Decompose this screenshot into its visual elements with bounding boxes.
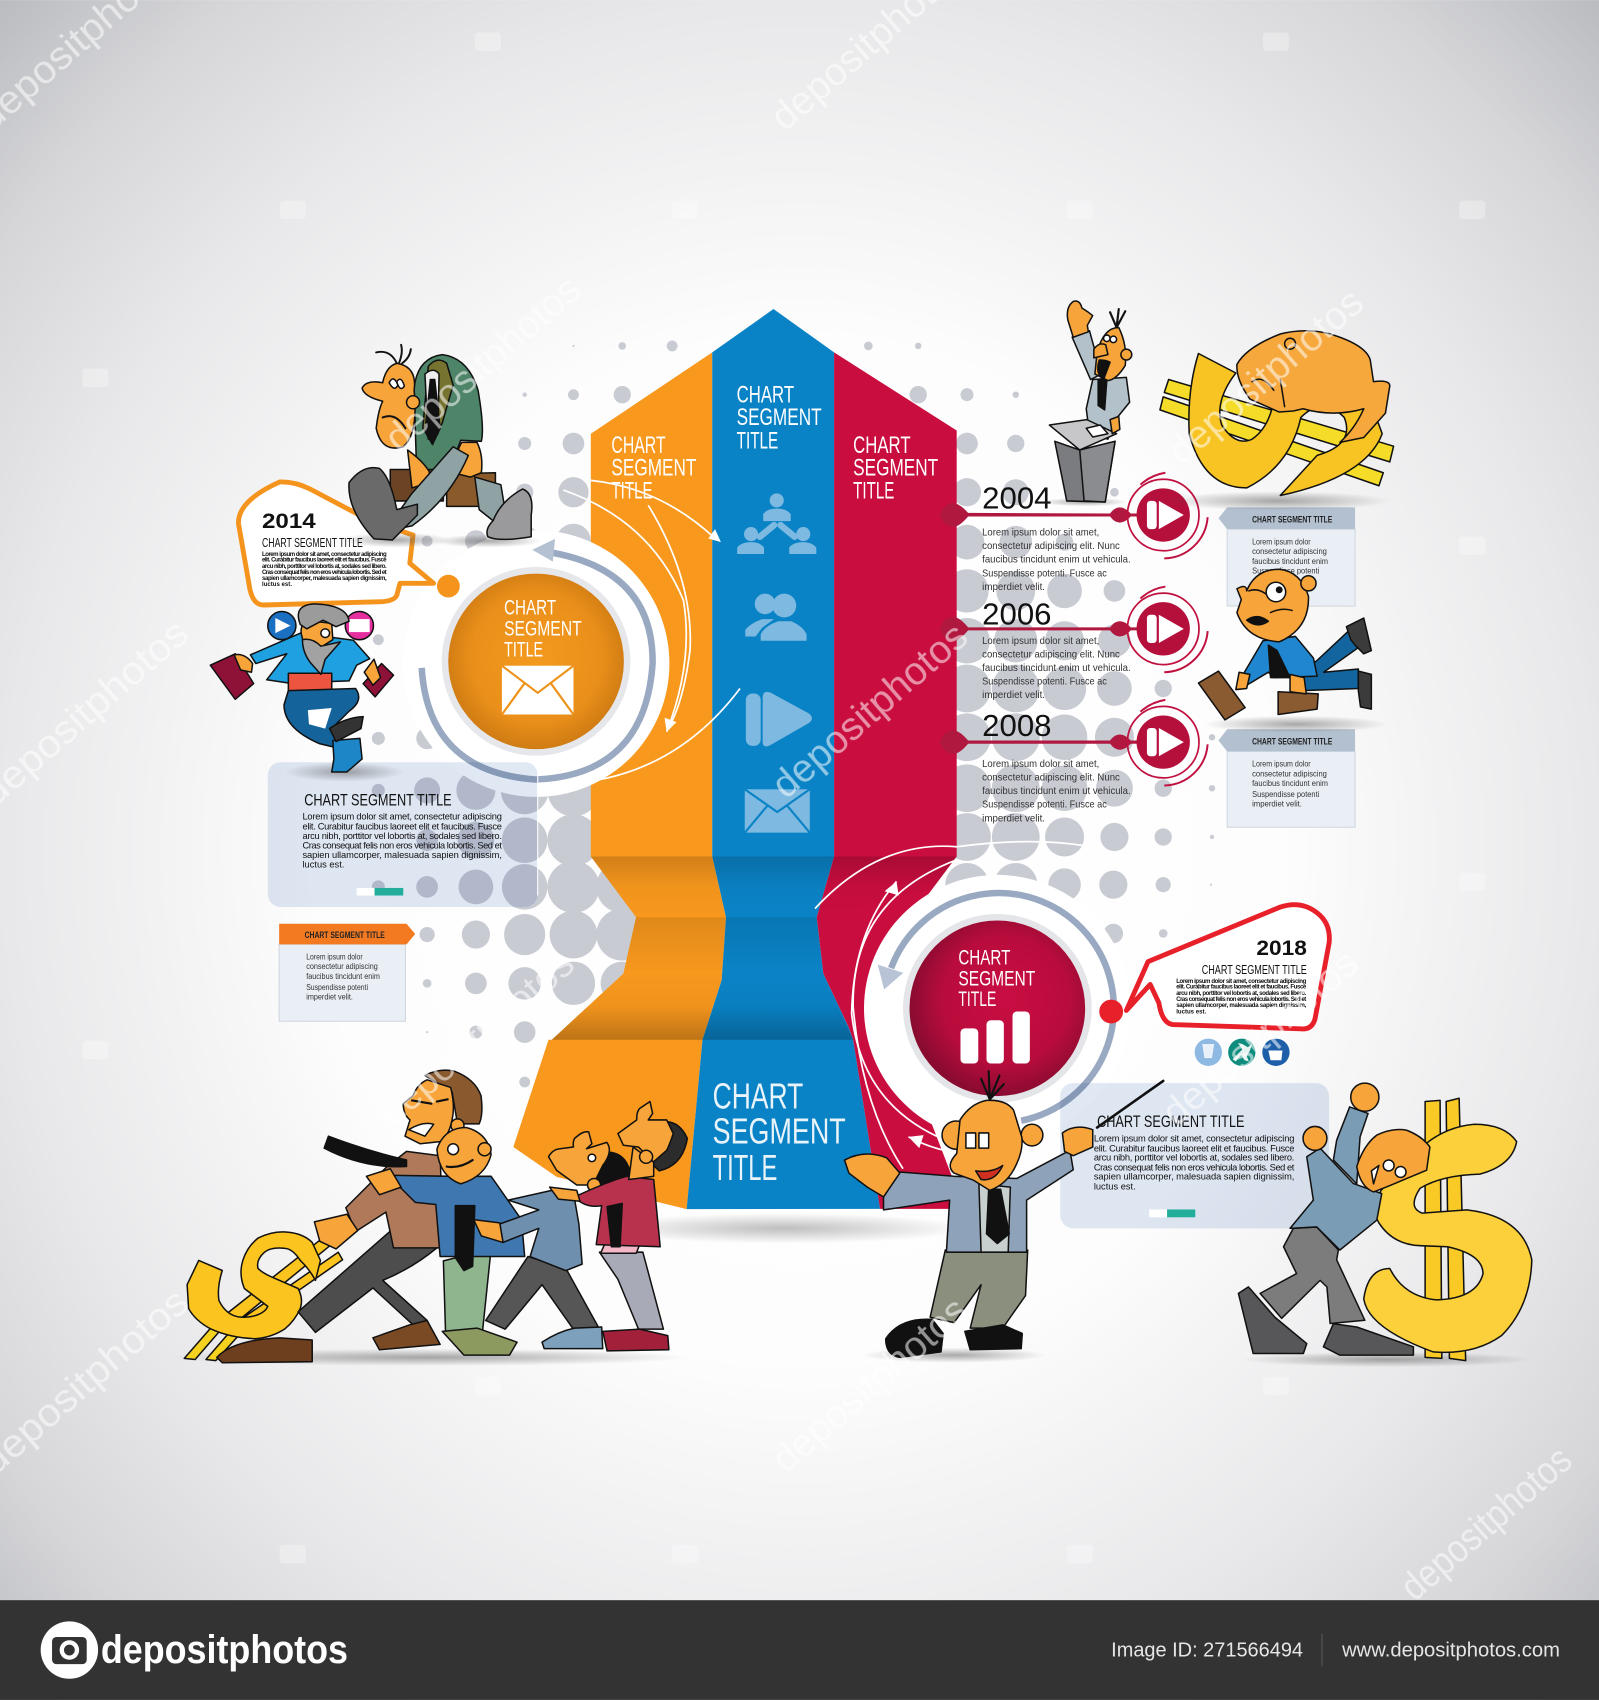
heading: CHART SEGMENT TITLE (1252, 736, 1332, 746)
watermarks: depositphotos (1154, 942, 1366, 1134)
footer bar (0, 1600, 1599, 1700)
panel body text (1094, 1134, 1295, 1191)
text: Suspendisse potenti. Fusce ac (982, 568, 1107, 579)
icon: two people (745, 594, 807, 641)
image id: Image ID: 271566494 (1111, 1639, 1303, 1662)
text: faucibus tincidunt enim ut vehicula. (982, 663, 1131, 674)
text: faucibus tincidunt enim (1252, 557, 1328, 566)
panel body text: luctus est. (1094, 1181, 1136, 1191)
disc heading: CHART (958, 945, 1010, 970)
watermarks: depositphotos (370, 942, 582, 1134)
man three (474, 1132, 630, 1349)
watermarks: depositphotos (1159, 281, 1372, 473)
info box: top right (1218, 507, 1355, 606)
icon: blue play badge (268, 612, 296, 640)
crimson band heading: TITLE (853, 478, 894, 505)
year: 2004 (982, 483, 1052, 516)
orange band heading: SEGMENT (611, 454, 697, 481)
body text (262, 552, 387, 588)
halftone dot pattern (372, 340, 1215, 1087)
text: Suspendisse potenti. Fusce ac (982, 677, 1107, 688)
info box: lower right (1218, 729, 1355, 827)
panel body text: Lorem ipsum dolor sit amet, consectetur adipiscing (1094, 1134, 1294, 1144)
text: Lorem ipsum dolor (1252, 760, 1311, 769)
text: consectetur adipiscing elit. Nunc (982, 773, 1120, 784)
arrow band: crimson (817, 352, 957, 1209)
text: faucibus tincidunt enim (1252, 779, 1328, 788)
panel heading: CHART SEGMENT TITLE (1097, 1112, 1245, 1131)
panel body text (302, 812, 502, 869)
text (1252, 760, 1328, 809)
timeline: 2004 (940, 473, 1208, 593)
text: Suspendisse potenti (1252, 790, 1320, 799)
text (982, 759, 1131, 824)
watermarks: depositphotos (377, 268, 589, 460)
body text: Lorem ipsum dolor sit amet, consectetur adipiscing (1176, 979, 1307, 985)
thin white orbit arrows (563, 480, 1084, 1169)
page indicator (1149, 1209, 1195, 1217)
icon: envelope (745, 789, 810, 833)
panel body text: Lorem ipsum dolor sit amet, consectetur adipiscing (302, 812, 502, 822)
text: faucibus tincidunt enim ut vehicula. (982, 786, 1131, 797)
crimson band heading: CHART (853, 432, 911, 459)
panel body text: Cras consequat felis non eros vehicula lobortis. Sed et (1094, 1162, 1295, 1172)
panel body text: arcu nibh, porttitor vel lobortis at, sodales sed libero. (302, 831, 502, 841)
logo icon (41, 1621, 98, 1679)
disc heading: SEGMENT (958, 965, 1035, 990)
crimson band heading: SEGMENT (853, 454, 938, 481)
character: bald man on big dollar (1160, 331, 1394, 496)
timeline: 2006 (940, 587, 1208, 701)
icon row: music, plane, coffee (1195, 1039, 1290, 1066)
disc heading: CHART (504, 595, 556, 620)
text: consectetur adipiscing elit. Nunc (982, 650, 1120, 661)
icon: bar chart (960, 1012, 1030, 1064)
icon: pink mail badge (345, 612, 373, 640)
heading: CHART SEGMENT TITLE (305, 930, 385, 940)
text (982, 528, 1131, 593)
heading: CHART SEGMENT TITLE (1202, 963, 1307, 977)
shadow under arrow (598, 1213, 967, 1244)
text: Lorem ipsum dolor (306, 952, 363, 961)
body text: arcu nibh, porttitor vel lobortis at, sodales sed libero. (262, 564, 387, 570)
body text: arcu nibh, porttitor vel lobortis at, sodales sed libero. (1176, 991, 1307, 997)
orange band heading: TITLE (611, 478, 653, 505)
blue band heading: CHART (737, 381, 794, 408)
body text: elit. Curabitur faucibus laoreet elit et faucibus. Fusce (262, 558, 387, 564)
text: Suspendisse potenti (306, 983, 368, 992)
arrow chart (513, 309, 957, 1209)
text: consectetur adipiscing (1252, 547, 1327, 556)
dollar stripes (1160, 380, 1394, 486)
disc heading: TITLE (504, 637, 543, 662)
pointer stick (1097, 1081, 1163, 1128)
circular arrow ring (880, 893, 1114, 1121)
year: 2018 (1256, 937, 1307, 960)
character: dancing professor with folders (210, 604, 394, 772)
watermarks: depositphotos (764, 614, 976, 807)
man four (550, 1102, 687, 1351)
character: weary walker with briefcases (349, 345, 532, 540)
icon: play (746, 692, 812, 746)
man two (366, 1128, 525, 1355)
left panel: chart segment title (268, 762, 538, 907)
blue band heading: SEGMENT (737, 404, 822, 431)
panel body text: arcu nibh, porttitor vel lobortis at, sodales sed libero. (1094, 1153, 1294, 1163)
circle: crimson segment (864, 875, 1131, 1142)
timeline: 2008 (940, 700, 1208, 824)
divider (1321, 1634, 1323, 1666)
site url: www.depositphotos.com (1341, 1639, 1560, 1662)
circle: orange segment (403, 530, 669, 797)
dot (437, 575, 460, 598)
panel body text: elit. Curabitur faucibus laoreet elit et faucibus. Fusce (302, 821, 502, 831)
body text: Cras consequat felis non eros vehicula lobortis. Sed et (1176, 997, 1306, 1003)
character: running man with briefcases (1198, 569, 1371, 720)
icon: envelope (502, 666, 573, 714)
text: consectetur adipiscing (1252, 769, 1327, 778)
panel body text: Cras consequat felis non eros vehicula lobortis. Sed et (302, 840, 502, 850)
text: imperdiet velit. (1252, 800, 1302, 809)
text: imperdiet velit. (306, 993, 353, 1002)
logo wordmark: depositphotos (101, 1628, 348, 1672)
icon: play button (1127, 587, 1208, 672)
arrow band: blue (687, 309, 880, 1209)
year: 2014 (262, 510, 316, 533)
body text: Cras consequat felis non eros vehicula lobortis. Sed et (262, 570, 387, 576)
panel body text: elit. Curabitur faucibus laoreet elit et faucibus. Fusce (1094, 1143, 1294, 1153)
disc heading: SEGMENT (504, 615, 582, 640)
right panel: chart segment title (1060, 1083, 1329, 1228)
text: Suspendisse potenti. Fusce ac (982, 800, 1107, 811)
text: imperdiet velit. (982, 690, 1045, 701)
man one (217, 1070, 482, 1363)
crimson band heading (853, 432, 938, 505)
character: man pushing big dollar (1238, 1083, 1532, 1361)
text: consectetur adipiscing elit. Nunc (982, 541, 1120, 552)
year: 2006 (982, 599, 1052, 632)
orange band heading (611, 432, 697, 505)
orange band heading: CHART (611, 432, 666, 459)
year: 2008 (982, 710, 1052, 743)
text: Suspendisse potenti (1252, 567, 1320, 576)
circular arrow ring (422, 539, 653, 780)
watermarks: depositphotos (764, 1289, 976, 1481)
character group: tug of war (184, 1070, 687, 1363)
dot (1099, 1000, 1123, 1023)
character: presenter with pointer (844, 1071, 1163, 1357)
text: Lorem ipsum dolor (1252, 537, 1311, 546)
watermarks: depositphotos (1392, 1438, 1580, 1609)
panel body text: sapien ullamcorper, malesuada sapien dignissim, (302, 850, 502, 860)
page indicator (357, 888, 403, 896)
icon: play button (1127, 473, 1208, 558)
callout: 2018 (1099, 905, 1329, 1029)
disc heading (504, 595, 582, 662)
body text: sapien ullamcorper, malesuada sapien dignissim, (262, 576, 387, 582)
heading: CHART SEGMENT TITLE (262, 536, 363, 550)
large bottom heading: TITLE (713, 1148, 777, 1188)
heading: CHART SEGMENT TITLE (1252, 515, 1332, 525)
icon: network of people (737, 493, 816, 554)
disc heading (958, 945, 1035, 1011)
character: speaker at podium (1049, 301, 1132, 502)
info box: lower left (279, 924, 415, 1021)
text: consectetur adipiscing (306, 962, 378, 971)
large bottom heading (713, 1077, 846, 1188)
text: imperdiet velit. (982, 813, 1045, 824)
blue band heading: TITLE (737, 427, 778, 454)
dollar sign pulled by rope (184, 1232, 343, 1361)
character shadows (168, 491, 1534, 1367)
disc heading: TITLE (958, 986, 996, 1011)
body text: luctus est. (262, 582, 292, 588)
text: faucibus tincidunt enim (306, 972, 380, 981)
callout: 2014 (238, 482, 460, 605)
large bottom heading: CHART (713, 1077, 803, 1117)
body text: luctus est. (1176, 1009, 1207, 1015)
panel body text: sapien ullamcorper, malesuada sapien dignissim, (1094, 1172, 1294, 1182)
text: Lorem ipsum dolor sit amet, (982, 636, 1099, 647)
body text: elit. Curabitur faucibus laoreet elit et faucibus. Fusce (1176, 985, 1307, 991)
watermark camera marks (82, 33, 1485, 1563)
blue band heading (737, 381, 822, 454)
text: Lorem ipsum dolor sit amet, (982, 759, 1099, 770)
body text: Lorem ipsum dolor sit amet, consectetur adipiscing (262, 552, 387, 558)
text (306, 952, 380, 1002)
panel body text: luctus est. (302, 859, 344, 869)
panel heading: CHART SEGMENT TITLE (304, 791, 452, 810)
arrow band: orange (513, 352, 726, 1209)
body text (1176, 979, 1307, 1015)
text (1252, 537, 1328, 576)
icon: play button (1127, 700, 1208, 785)
dollar sign (1364, 1098, 1532, 1361)
text: imperdiet velit. (982, 582, 1045, 593)
large bottom heading: SEGMENT (713, 1112, 846, 1152)
text: Lorem ipsum dolor sit amet, (982, 528, 1099, 539)
text (982, 636, 1131, 701)
text: faucibus tincidunt enim ut vehicula. (982, 555, 1131, 566)
body text: sapien ullamcorper, malesuada sapien dignissim, (1176, 1003, 1307, 1009)
